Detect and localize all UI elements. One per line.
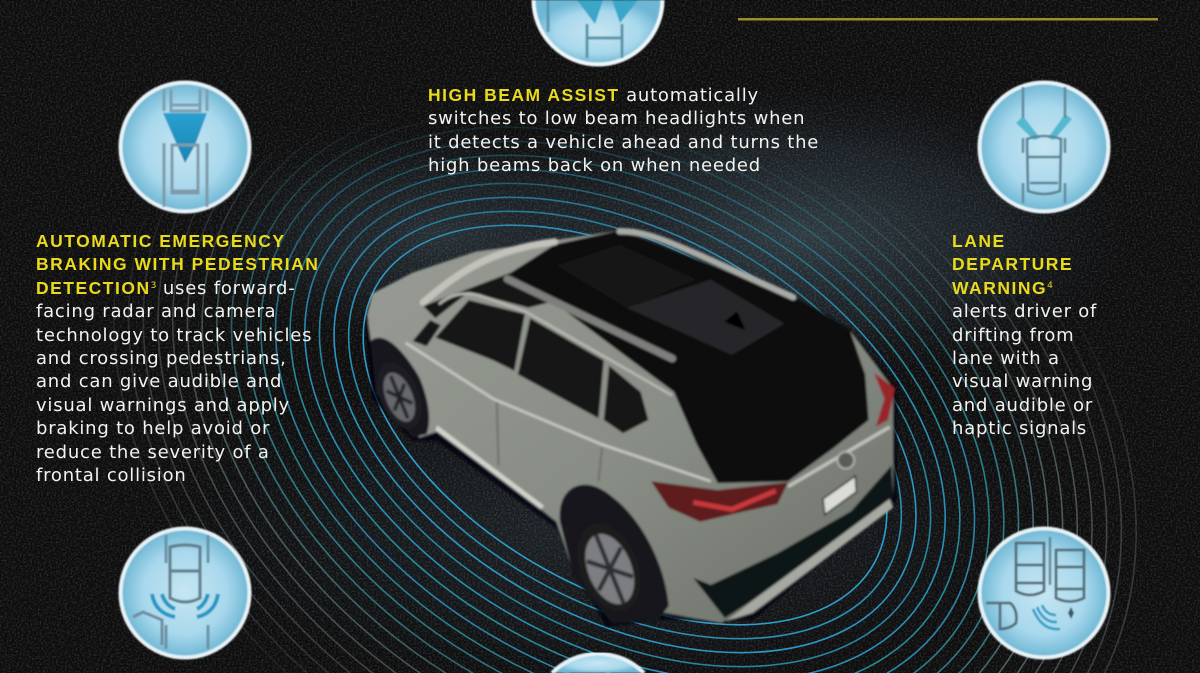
text: automatic emergency braking: technology to track vehicles bbox=[36, 325, 312, 346]
window trim bbox=[439, 294, 672, 395]
following car bbox=[164, 143, 207, 207]
tail light left bbox=[651, 481, 788, 522]
text: automatic emergency braking: DETECTION3 uses forward- bbox=[36, 278, 295, 299]
tail light highlight bbox=[693, 491, 776, 509]
text: lane departure warning: DEPARTURE bbox=[952, 254, 1073, 274]
text: automatic emergency braking: visual warnings and apply bbox=[36, 395, 290, 416]
roof and rear glass bbox=[511, 231, 869, 483]
text: automatic emergency braking bbox=[36, 231, 319, 486]
text: lane departure warning bbox=[952, 231, 1097, 439]
side windows bbox=[413, 300, 648, 433]
icon: lane departure warning bbox=[980, 82, 1108, 212]
body creases bbox=[406, 343, 890, 487]
decorative top-right rule bbox=[738, 18, 1158, 20]
text: lane departure warning: WARNING4 bbox=[952, 278, 1053, 298]
vehicle body bbox=[367, 231, 893, 623]
vehicle: SUV seen from above bbox=[365, 229, 897, 627]
icon: bottom feature bbox=[552, 654, 644, 673]
text: lane departure warning: lane with a bbox=[952, 348, 1060, 369]
shark fin antenna bbox=[724, 311, 746, 331]
icon: blind spot warning bbox=[980, 528, 1108, 658]
text: automatic emergency braking: BRAKING WITH PEDESTRIAN bbox=[36, 254, 319, 274]
text: automatic emergency braking: and can give audible and bbox=[36, 371, 282, 392]
text: automatic emergency braking: facing radar and camera bbox=[36, 301, 276, 322]
text: lane departure warning: drifting from bbox=[952, 325, 1074, 346]
text: high beam assist: switches to low beam headlights when bbox=[428, 108, 805, 129]
roof rails bbox=[423, 231, 793, 359]
text: automatic emergency braking: and crossing pedestrians, bbox=[36, 348, 287, 369]
rear wheel bbox=[565, 514, 653, 620]
sensor rings around vehicle bbox=[113, 114, 1137, 673]
text: automatic emergency braking: frontal collision bbox=[36, 465, 187, 486]
text: lane departure warning: LANE bbox=[952, 231, 1006, 251]
front wheel bbox=[368, 356, 430, 435]
radar waves bbox=[1033, 605, 1060, 629]
lower cladding and wheel arches bbox=[371, 338, 893, 623]
dark strip beside hood bbox=[423, 273, 556, 318]
text: automatic emergency braking: AUTOMATIC EMERGENCY bbox=[36, 231, 286, 251]
text: high beam assist: high beams back on when needed bbox=[428, 155, 761, 176]
licence plate bbox=[823, 476, 856, 515]
text: lane departure warning: and audible or bbox=[952, 395, 1093, 416]
icon: automatic emergency braking bbox=[120, 82, 250, 212]
text: high beam assist: it detects a vehicle ahead and turns the bbox=[428, 132, 819, 153]
roof panel sheen bbox=[556, 245, 697, 308]
icon: rear cross traffic alert bbox=[120, 528, 250, 658]
radar waves bbox=[152, 594, 218, 617]
text: lane departure warning: visual warning bbox=[952, 371, 1093, 392]
text: automatic emergency braking: braking to help avoid or bbox=[36, 418, 270, 439]
lead car bbox=[164, 89, 207, 111]
text: high beam assist bbox=[428, 85, 819, 176]
text: lane departure warning: alerts driver of bbox=[952, 301, 1097, 322]
text: high beam assist: HIGH BEAM ASSIST automatically bbox=[428, 85, 759, 106]
text: automatic emergency braking: reduce the severity of a bbox=[36, 442, 270, 463]
emblem bbox=[837, 452, 854, 469]
braking beam bbox=[163, 113, 207, 163]
tail light right bbox=[874, 373, 895, 427]
icon: high beam assist bbox=[534, 0, 662, 64]
text: lane departure warning: haptic signals bbox=[952, 418, 1087, 439]
vehicle shadow bbox=[365, 229, 897, 627]
rear roof sheen bbox=[627, 280, 784, 355]
